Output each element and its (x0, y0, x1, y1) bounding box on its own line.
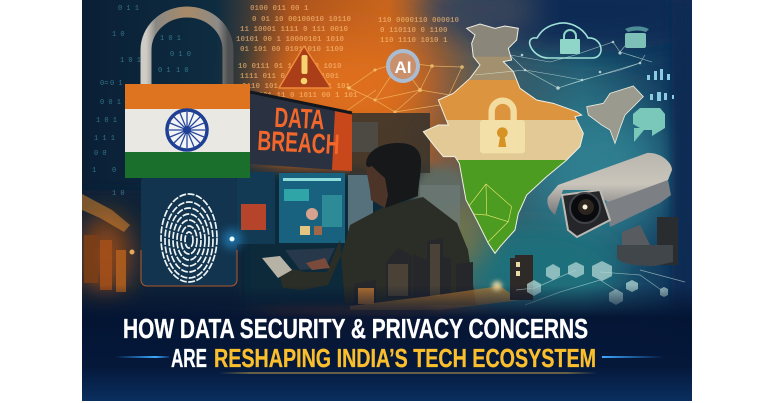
city skyline (350, 238, 520, 310)
monitor: left (237, 172, 275, 244)
icon: wifi lock (625, 26, 649, 48)
binary code rain: left: 0 1 (158, 67, 171, 75)
fingerprint (161, 194, 217, 282)
binary code rain: left: 1 0 1 (96, 117, 117, 125)
hexagon network (516, 261, 685, 305)
data breach screen: BREACH (257, 125, 340, 160)
title: line one: HOW DATA SECURITY & PRIVACY CONCERNS (123, 313, 588, 344)
binary code rain: left: 0 1 (110, 80, 123, 88)
map: saffron band (439, 80, 580, 120)
binary code rain: left: 1 0 (112, 31, 125, 39)
map: padlock (480, 101, 525, 153)
far right buildings (510, 255, 533, 300)
infographic hero artwork (82, 0, 692, 401)
binary code rain: orange top centre: 0 01 10 00100010 10110 (252, 16, 352, 24)
binary code rain: orange top centre: 10101 00 1 10000101 1010 (236, 36, 345, 44)
security camera (547, 153, 678, 266)
map: Himalayan grey region (468, 24, 518, 57)
bottom fade (82, 285, 692, 401)
padlock flag: saffron (125, 84, 250, 111)
binary code rain: left: 0 1 0 (170, 51, 191, 59)
icon: cloud lock (530, 23, 601, 58)
binary code rain: left: 1 (92, 167, 96, 175)
person: body and arm (280, 197, 476, 305)
padlock flag: white (125, 109, 250, 153)
accent line: right glow (602, 356, 664, 358)
binary code rain: orange top centre: 0 110110 0 1100 (380, 27, 448, 35)
keyboard and hand (262, 248, 335, 278)
binary code rain: orange top centre: 110 0000110 000010 (378, 17, 460, 25)
blue sparkle (223, 230, 241, 248)
network lines: teal (475, 40, 652, 90)
binary code rain: left: 0= (100, 80, 108, 88)
padlock shackle (146, 12, 228, 84)
AI badge (388, 51, 418, 81)
icon: signal bars (647, 69, 674, 101)
warning triangle (279, 46, 331, 88)
binary code rain: left: 0 0 (94, 150, 107, 158)
camera: hood (547, 153, 672, 215)
binary code rain: orange top centre: 01 101 00 01011010 1100 (240, 46, 344, 54)
title: line two, white: ARE (171, 343, 207, 373)
camera: wall mount (617, 217, 678, 266)
binary code rain: orange top centre: 0001 11 0 1011 00 1 101 (254, 92, 358, 100)
binary code rain: left: 1 0 (112, 190, 125, 198)
padlock flag: wheel (167, 110, 207, 150)
binary code rain: left: 0 (112, 167, 116, 175)
binary code rain: left (92, 5, 191, 198)
map: north-east region (587, 86, 643, 143)
padlock (125, 12, 250, 286)
tall screens behind the person (350, 113, 460, 233)
icon: shield (633, 108, 665, 142)
padlock body: lower fingerprint panel (141, 176, 237, 286)
binary code rain: orange top centre: 110 1110 1010 1 (380, 37, 448, 45)
monitors (237, 172, 373, 244)
binary code rain: left: 1 1 1 (94, 135, 115, 143)
padlock flag: green (125, 152, 250, 178)
binary code rain: orange top centre: 1111 011 0 1111 1 1001 (240, 73, 340, 81)
title: line two, gold: RESHAPING INDIA’S TECH ECOSYSTEM (214, 343, 596, 373)
binary code rain: orange top centre: 0110 101 1 01 0 1001 101 (242, 83, 351, 91)
binary code rain: orange top centre (236, 5, 460, 100)
map: outline (423, 24, 583, 253)
binary code rain: orange top centre: 10 0111 01 1 00100 1010 (238, 63, 342, 71)
binary code rain: left: 1 0 1 (160, 35, 181, 43)
accent line: left glow (115, 356, 169, 358)
monitor: right (348, 175, 373, 235)
data breach screen: DATA (274, 102, 325, 135)
camera: lens (570, 193, 600, 223)
map: green band (458, 160, 566, 252)
binary code rain: left: 1 0 1 (120, 57, 141, 65)
binary code rain: left: 0 1 1 (118, 5, 139, 13)
binary code rain: orange top centre: 0100 011 00 1 (250, 5, 309, 13)
India map (413, 20, 643, 260)
background wash (82, 0, 692, 318)
data breach screen (250, 92, 352, 171)
map: white band (424, 120, 583, 160)
person (280, 143, 476, 305)
monitor: centre dashboard (279, 173, 345, 243)
title (123, 313, 596, 373)
network lines: amber (345, 60, 464, 114)
binary code rain: left: 0 0 1 (100, 99, 121, 107)
binary code rain: left: 1 0 (176, 67, 189, 75)
accent line: gold underline (219, 372, 597, 374)
person: head (366, 143, 421, 208)
binary code rain: orange top centre: 11 10001 1111 0 111 0010 (240, 26, 349, 34)
person: face (366, 166, 388, 208)
left orange city glow (82, 194, 134, 292)
AI badge: AI (394, 58, 412, 77)
map: network on green (469, 184, 512, 242)
camera: lower housing (606, 180, 671, 227)
camera: lens housing (562, 190, 610, 237)
